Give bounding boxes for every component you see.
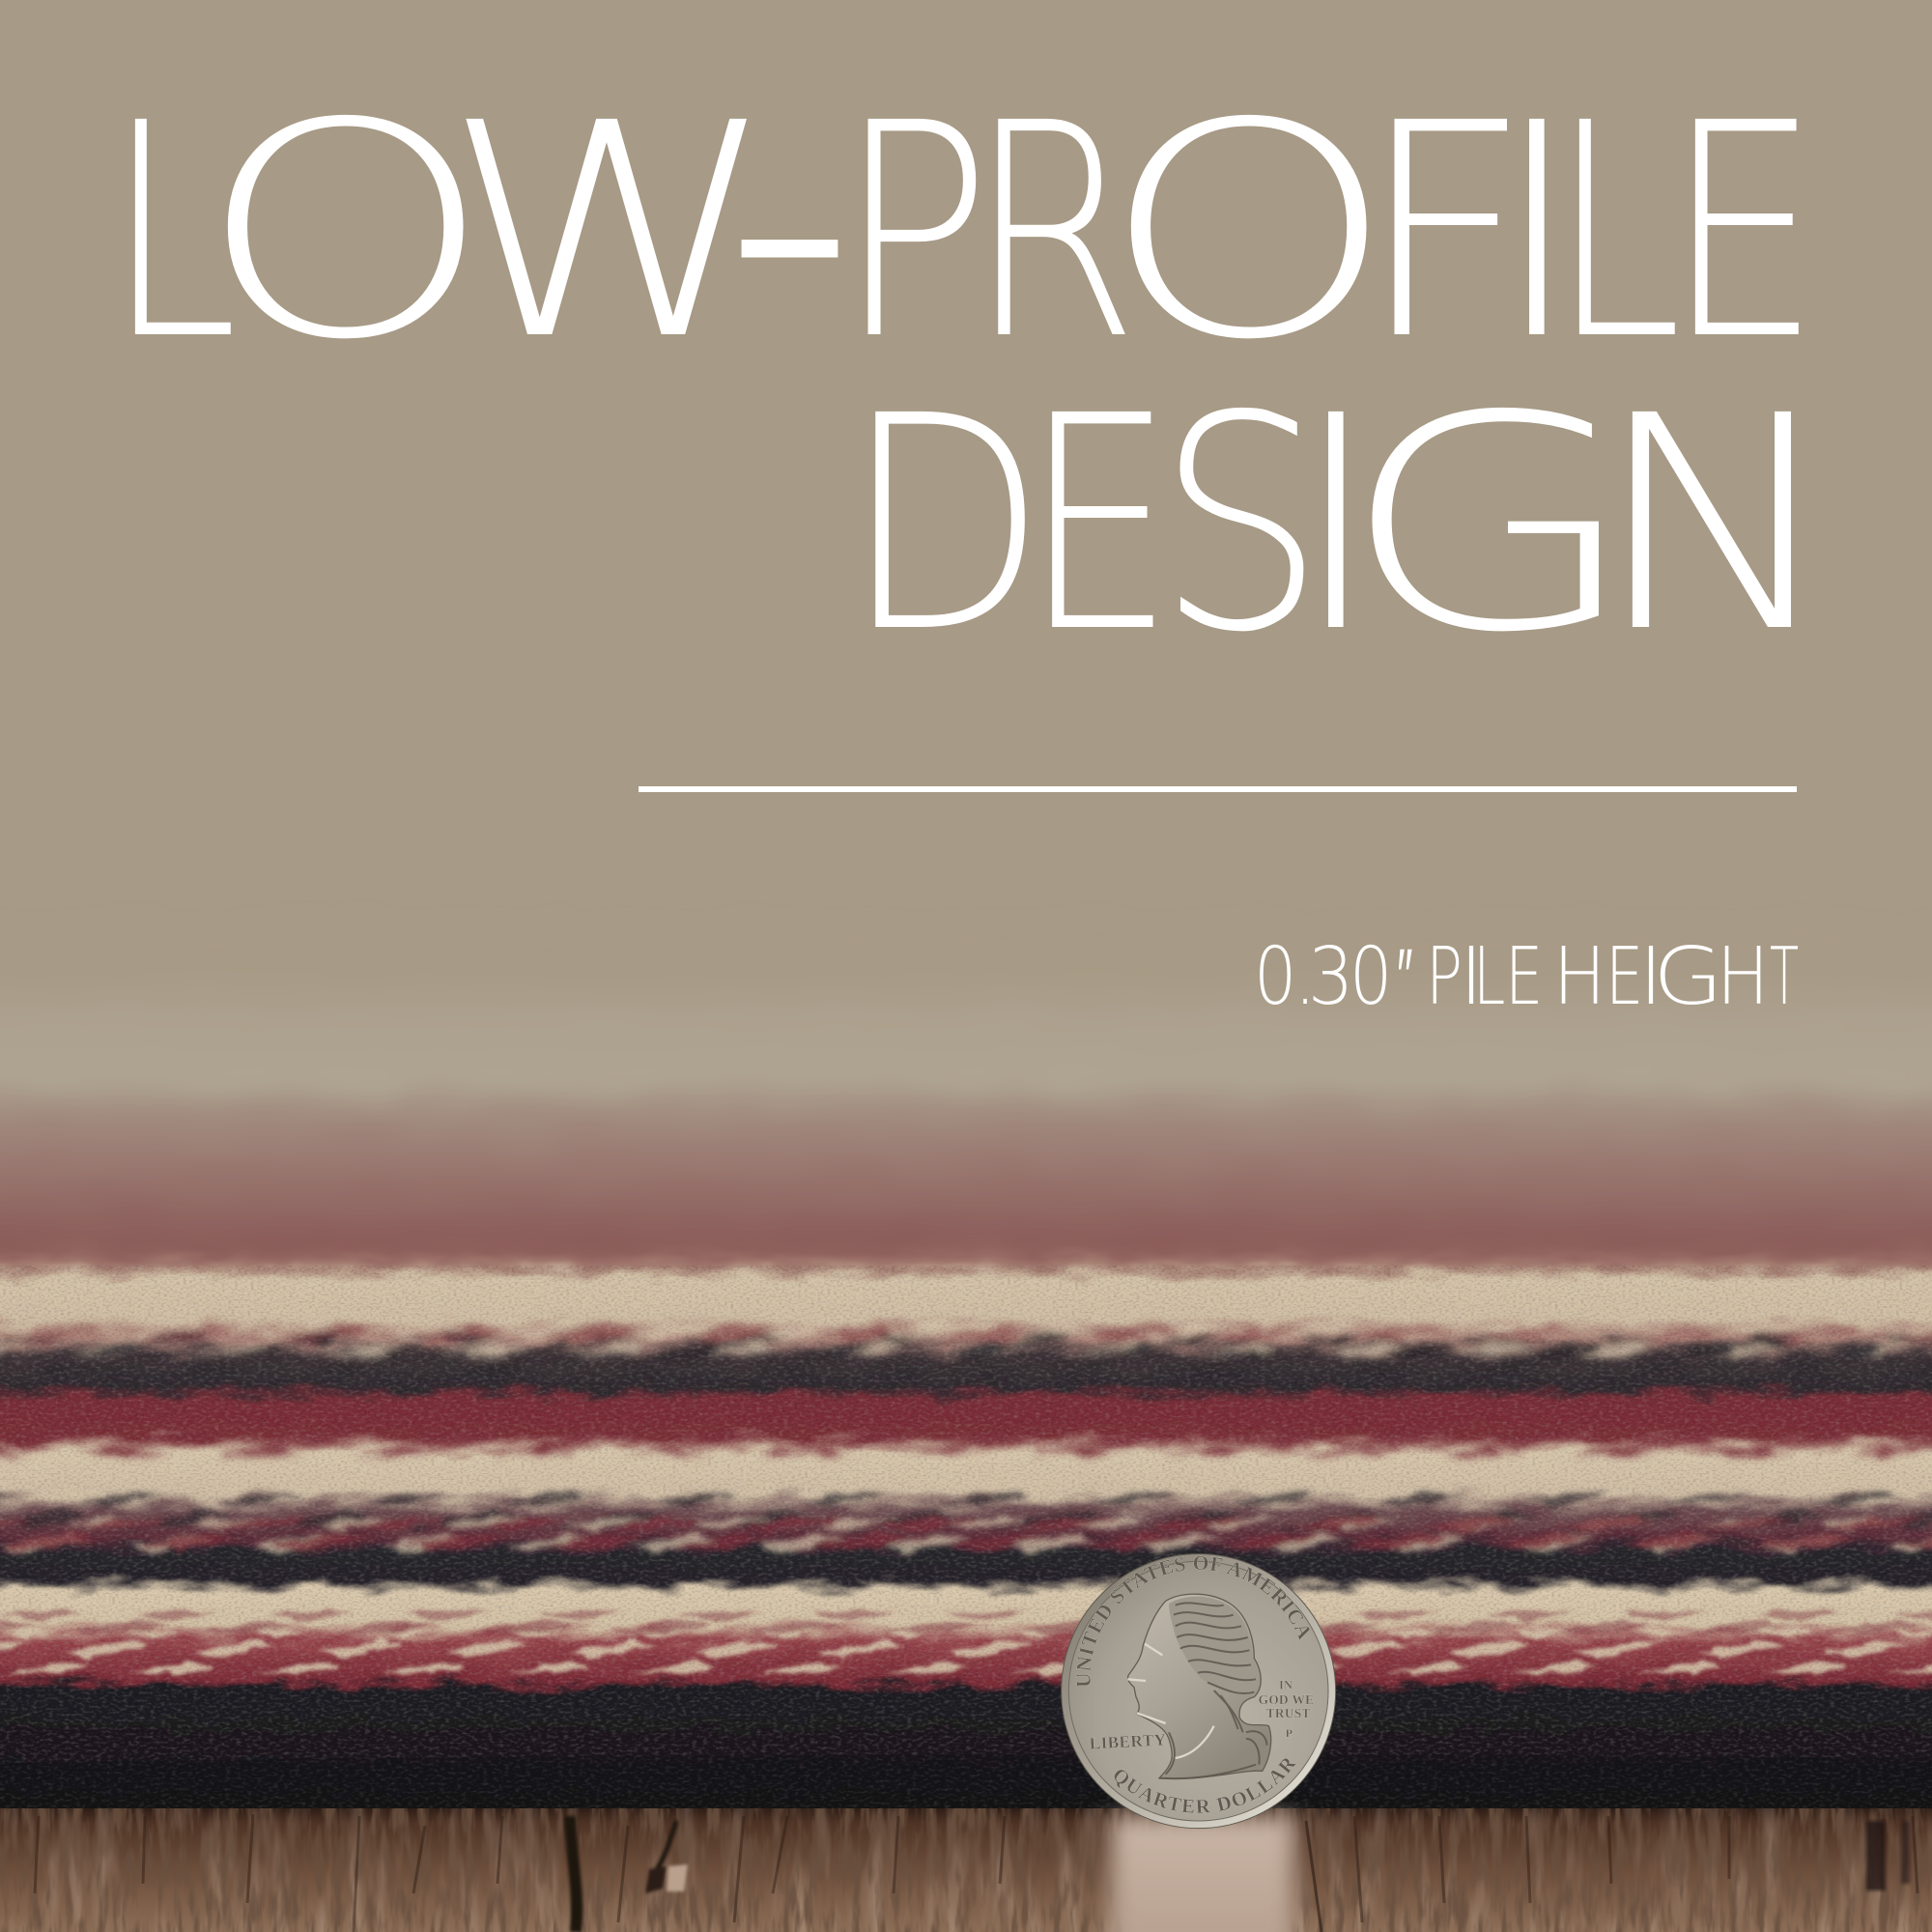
title line 1: F	[1357, 61, 1532, 405]
title line 1: R	[968, 61, 1138, 405]
rug: stripe bands	[0, 869, 1932, 1835]
pile height caption: H	[1717, 931, 1769, 1023]
title line 2: D	[843, 354, 1047, 697]
pile height caption: P	[1426, 931, 1463, 1023]
title line 1: O	[197, 61, 494, 405]
pile height caption: G	[1653, 931, 1723, 1023]
coin lettering: TRUST	[1266, 1706, 1311, 1720]
title line 1: E	[1665, 61, 1820, 405]
coin lettering: GOD WE	[1259, 1692, 1314, 1707]
pile height caption	[1254, 931, 1799, 1023]
rug: middle herringbone	[0, 1493, 1932, 1553]
pile height caption: ″	[1397, 931, 1413, 1023]
pile height caption: 0	[1254, 931, 1296, 1023]
rug: near herringbone	[0, 1611, 1932, 1673]
coin lettering: P	[1286, 1726, 1293, 1740]
pile height caption: I	[1639, 931, 1662, 1023]
pile height caption: I	[1460, 931, 1483, 1023]
title line 1	[106, 0, 1820, 632]
coin lettering: LIBERTY	[1089, 1731, 1167, 1753]
coin rim	[1062, 1554, 1336, 1829]
title line 1: L	[1550, 61, 1682, 405]
divider rule	[639, 786, 1797, 792]
title line 2: G	[1340, 354, 1640, 697]
title line 2: E	[1023, 354, 1175, 697]
pile height caption: 3	[1308, 931, 1353, 1023]
title line 1: W	[442, 61, 779, 405]
coin lettering: QUARTER DOLLAR	[1114, 1758, 1296, 1814]
rug: out-of-focus far stripes	[0, 927, 1932, 1256]
coin face	[1068, 1561, 1328, 1821]
coin lettering: IN	[1279, 1679, 1293, 1692]
pile height caption: T	[1770, 931, 1799, 1023]
coin lettering	[1076, 1555, 1314, 1814]
title line 2: S	[1156, 354, 1325, 697]
title line 2: N	[1592, 354, 1842, 697]
rug: dark fibre grain	[0, 1265, 1932, 1811]
pile height caption: 0	[1350, 931, 1392, 1023]
title line 2: I	[1293, 354, 1379, 697]
pile height caption: .	[1294, 931, 1316, 1023]
title line 1: P	[837, 61, 992, 405]
title line 1: O	[1100, 61, 1397, 405]
pile height caption: L	[1473, 931, 1505, 1023]
rug: fibre texture	[0, 1265, 1932, 1811]
coin lettering: UNITED STATES OF AMERICA	[1076, 1555, 1310, 1688]
pile height caption: H	[1553, 931, 1605, 1023]
icon: quarter dollar coin	[1061, 1553, 1337, 1830]
title line 2	[843, 354, 1842, 697]
title line 1: I	[1493, 61, 1580, 405]
portrait: Washington bust	[1127, 1594, 1271, 1778]
pile height caption: E	[1605, 931, 1643, 1023]
rug: black edge shading	[0, 1754, 1932, 1811]
title line 1: L	[106, 61, 238, 405]
pile height caption: E	[1505, 931, 1543, 1023]
floor: wood	[0, 1808, 1932, 1932]
rug: upper blurred herringbone	[0, 1314, 1932, 1455]
